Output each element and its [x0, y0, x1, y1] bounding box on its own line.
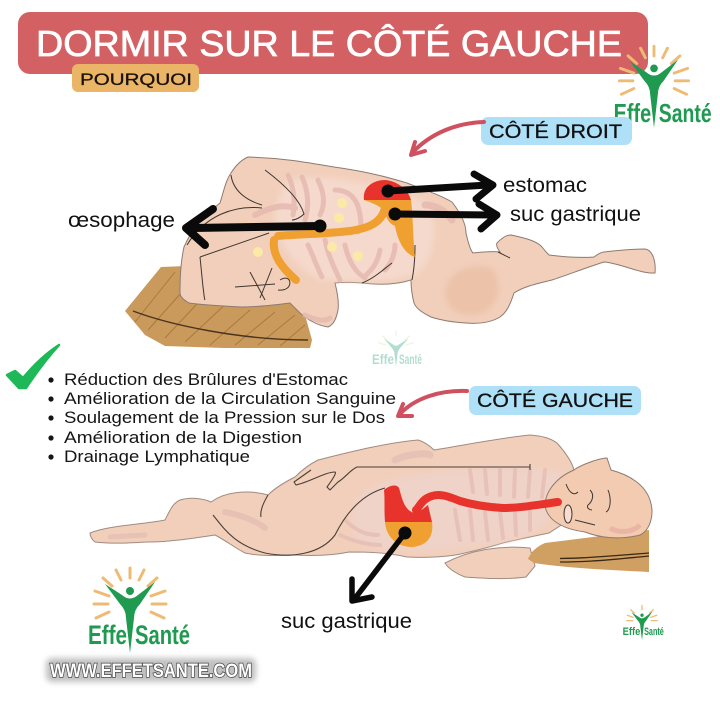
arrow: côté gauche — [398, 391, 467, 416]
logo: bottom right small — [623, 606, 664, 640]
logo: faint watermark: Effe — [372, 352, 394, 367]
label: suc gastrique droit: suc gastrique — [510, 203, 641, 226]
illustration: sleeping on left side — [90, 435, 652, 579]
benefits list: Amélioration de la Digestion — [64, 428, 302, 447]
lower arm — [445, 547, 535, 579]
benefits list: Drainage Lymphatique — [64, 447, 250, 466]
logo: faint watermark — [372, 331, 422, 367]
logo: bottom right small: Effe — [623, 626, 640, 638]
arrow: oesophage — [186, 209, 326, 245]
benefits list: Réduction des Brûlures d'Estomac — [64, 370, 349, 389]
arrow: suc gastrique gauche — [352, 527, 411, 601]
illustration: sleeping on right side — [125, 157, 655, 348]
logo: bottom left: Effe — [88, 620, 127, 650]
logo: top right: Effe — [614, 100, 651, 128]
digestive tube: orange — [274, 208, 385, 280]
pillow: right side — [125, 266, 312, 348]
arrow: estomac — [382, 174, 493, 199]
label: côté gauche: CÔTÉ GAUCHE — [477, 390, 633, 412]
logo: faint watermark: Santé — [399, 352, 422, 367]
stomach: red and orange — [364, 180, 415, 257]
label: estomac: estomac — [503, 174, 587, 197]
torso interior — [275, 178, 434, 281]
ribs — [110, 454, 545, 545]
stomach: red and orange — [384, 486, 432, 547]
logo: bottom right small: Santé — [644, 626, 664, 638]
contour lines — [187, 170, 510, 300]
pillow: left side — [528, 530, 649, 572]
title banner: DORMIR SUR LE CÔTÉ GAUCHE — [36, 23, 622, 64]
website url: WWW.EFFETSANTE.COM — [50, 661, 252, 682]
label: suc gastrique gauche: suc gastrique — [281, 610, 412, 633]
arrow: suc gastrique droit — [389, 204, 497, 229]
benefits list: Soulagement de la Pression sur le Dos — [64, 408, 385, 427]
logo: bottom left — [88, 568, 190, 653]
label: côté droit — [481, 117, 632, 145]
yellow spots — [253, 198, 363, 261]
pillow front — [528, 545, 560, 566]
label: côté droit: CÔTÉ DROIT — [489, 121, 622, 143]
title banner — [18, 12, 648, 74]
logo: top right — [614, 46, 712, 128]
subtitle badge: pourquoi — [72, 64, 199, 92]
arrow: côté droit — [411, 122, 484, 155]
body outline — [90, 435, 600, 557]
benefits list: Amélioration de la Circulation Sanguine — [64, 389, 396, 408]
chest interior — [351, 468, 561, 551]
subtitle badge: pourquoi: POURQUOI — [80, 70, 192, 89]
icon: green check mark — [7, 345, 59, 388]
head — [545, 458, 652, 538]
benefits list — [48, 370, 396, 466]
leg shading — [445, 266, 499, 315]
oesophagus: red — [416, 495, 558, 510]
label: oesophage: œsophage — [68, 209, 175, 232]
label: côté gauche — [469, 386, 641, 415]
logo: bottom left: Santé — [135, 620, 190, 650]
ribs — [255, 175, 452, 320]
contour lines — [213, 464, 530, 555]
body outline — [180, 157, 655, 327]
